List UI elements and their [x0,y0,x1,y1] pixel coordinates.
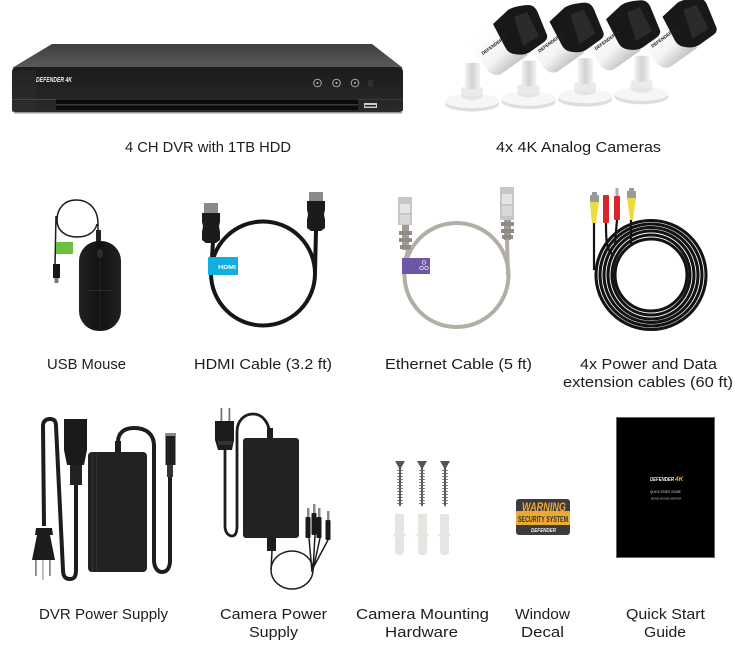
icon: camera 4 [614,0,717,104]
icon: HDMI cable: HDMI [218,265,237,271]
label: window decal [515,606,570,641]
icon: USB mouse [53,200,121,331]
icon: Ethernet cable [398,187,514,327]
label: DVR power supply: DVR Power Supply [39,606,168,623]
icon: camera 3 [558,0,660,107]
label: camera mounting hardware: Hardware [385,624,458,641]
icon: camera 3: DEFENDER 4K [594,28,623,51]
label: quick start guide [626,606,706,641]
icon: quick start guide booklet: AE7168_AE7168N_AE6T6424 [651,498,682,500]
icon: quick start guide booklet [616,418,714,558]
icon: HDMI cable [202,192,325,326]
label: camera power supply: Camera Power [220,606,327,623]
label: quick start guide: Quick Start [626,606,706,623]
icon: camera 1 [445,5,547,112]
icon: window decal: WARNING [522,500,566,514]
label: Ethernet cable: Ethernet Cable (5 ft) [385,356,532,373]
label: USB mouse: USB Mouse [47,356,126,373]
icon: camera power supply [215,408,330,589]
icon: power and data extension cable [590,188,706,330]
label: window decal: Window [515,606,570,623]
label: extension cables [563,356,733,391]
icon: camera 2: DEFENDER 4K [537,30,566,53]
label: camera mounting hardware [356,606,489,641]
label: camera power supply [220,606,327,641]
label: DVR: 4 CH DVR with 1TB HDD [125,139,291,156]
icon: window decal: SECURITY SYSTEM [518,515,568,524]
label: HDMI cable: HDMI Cable (3.2 ft) [194,356,332,373]
icon: window decal [516,499,570,535]
icon: quick start guide booklet: 4K [674,476,685,483]
label: window decal: Decal [521,624,564,641]
icon: mounting hardware [392,461,452,555]
label: quick start guide: Guide [644,624,686,641]
icon: quick start guide booklet: QUICK START GUIDE [650,490,682,494]
label: camera mounting hardware: Camera Mounting [356,606,489,623]
label: extension cables: 4x Power and Data [580,356,718,373]
label: cameras: 4x 4K Analog Cameras [496,139,661,156]
label: camera power supply: Supply [249,624,299,641]
icon: camera 2 [502,3,604,109]
icon: DVR recorder: DEFENDER 4K [36,77,73,84]
icon: camera 1: DEFENDER 4K [481,33,510,56]
icon: camera 4: DEFENDER 4K [650,25,679,49]
icon: quick start guide booklet: DEFENDER [650,477,674,483]
icon: DVR power supply [32,419,176,580]
icon: DVR recorder [12,44,403,114]
label: extension cables: extension cables (60 ft) [563,374,733,391]
icon: window decal: DEFENDER [531,528,556,534]
